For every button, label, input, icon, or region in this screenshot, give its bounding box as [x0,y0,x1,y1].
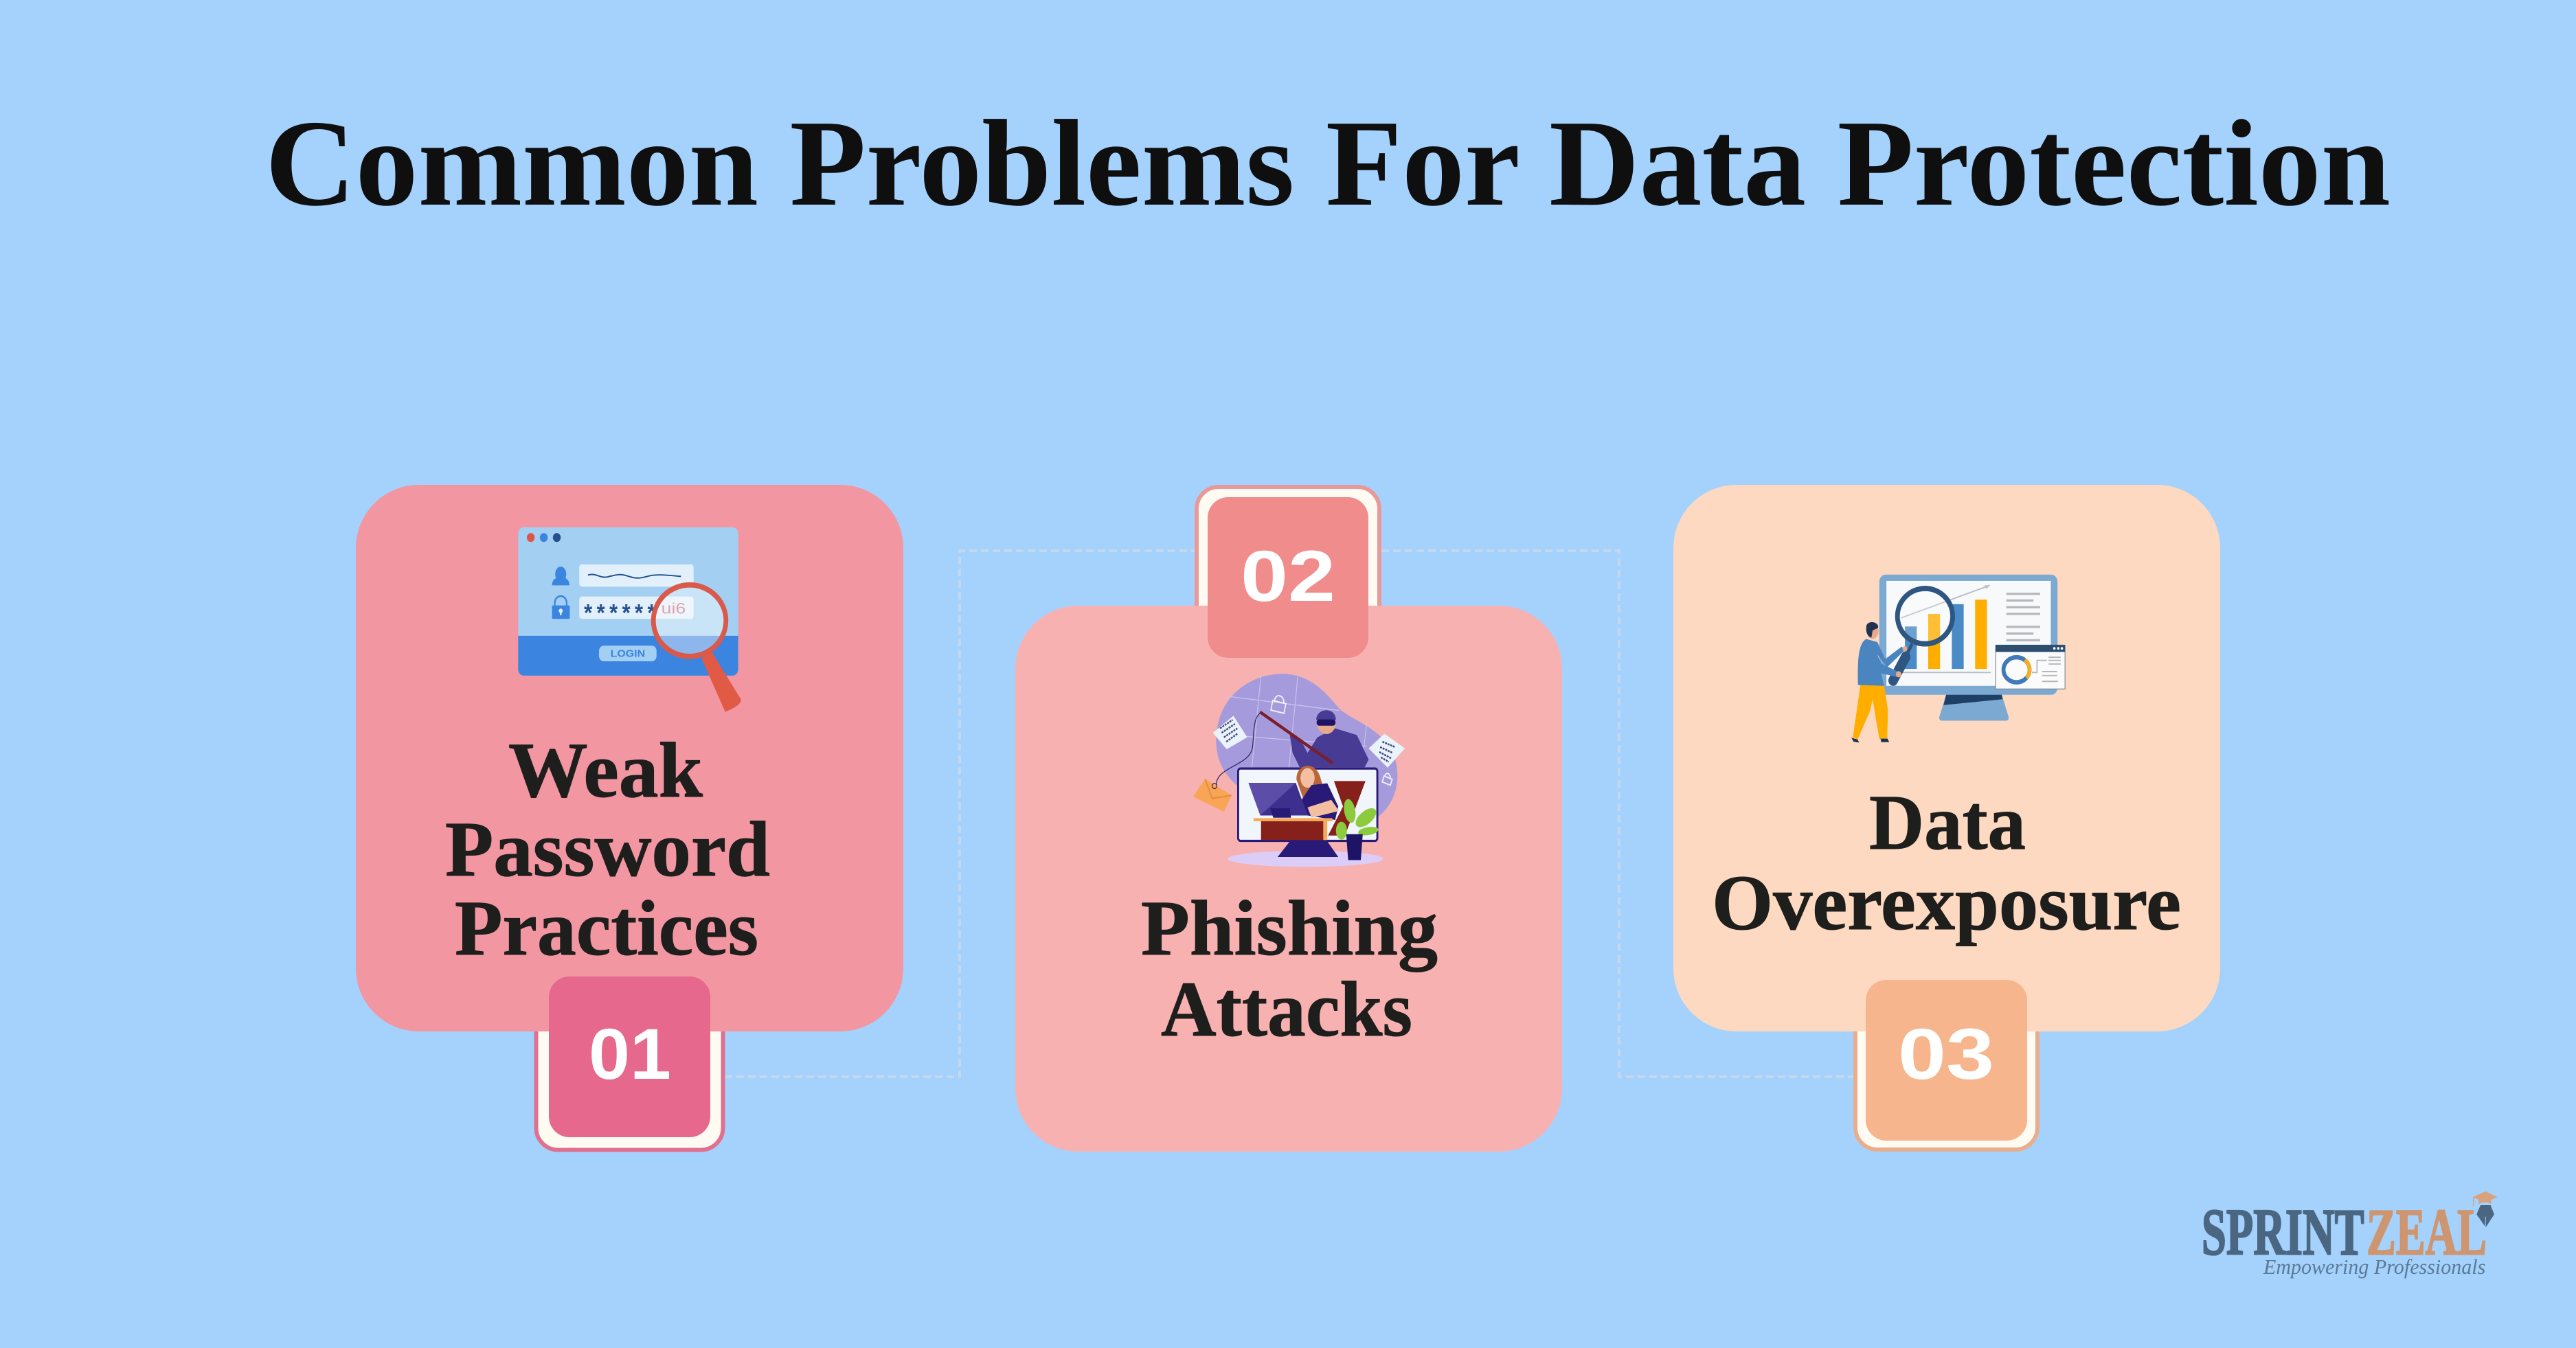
logo: Sprintzeal: SPRINT [2202,1196,2364,1269]
heading: data overexposure: Overexposure [1712,859,2181,946]
logo: Sprintzeal [2202,1191,2498,1279]
badge frame 03 [1855,893,2037,1150]
panel: phishing attacks [1015,487,1562,1152]
badge frame 01 [536,893,723,1150]
heading: weak password practices: Weak [508,727,703,814]
dashed connector between steps [725,551,1855,1077]
badge frame 02 [1197,487,1379,693]
card 01 [356,485,903,1031]
number 03: 03 [1898,1014,1994,1095]
icon: analyst inspecting monitor chart [1851,575,2065,742]
badge 01 [549,976,710,1137]
logo: Sprintzeal: Empowering Professionals [2263,1255,2485,1279]
heading: weak password practices: Password [445,806,770,893]
number 02: 02 [1241,536,1335,617]
number 01: 01 [589,1014,671,1095]
logo: Sprintzeal: ZEAL [2366,1196,2487,1269]
badge 02 [1208,497,1368,658]
card 03 [1673,485,2220,1031]
heading: phishing attacks: Phishing [1141,884,1438,972]
heading: data overexposure: Data [1869,779,2026,866]
badge 03 [1866,980,2027,1141]
icon: login form with magnifier [518,527,741,712]
icon: login form with magnifier: ui6 [662,600,686,617]
heading: phishing attacks: Attacks [1161,966,1412,1053]
panel: data overexposure [1673,485,2220,1150]
heading: data overexposure [1712,779,2181,946]
panel: weak password practices [356,485,903,1150]
title: Common Problems For Data Protection [265,95,2391,231]
card 02 [1015,606,1562,1152]
heading: weak password practices [445,727,770,972]
icon: phishing hacker and victim [1193,674,1405,867]
icon: login form with magnifier: ****** [584,600,656,627]
icon: login form with magnifier: LOGIN [611,648,645,659]
heading: weak password practices: Practices [455,884,758,972]
heading: phishing attacks [1141,884,1438,1053]
